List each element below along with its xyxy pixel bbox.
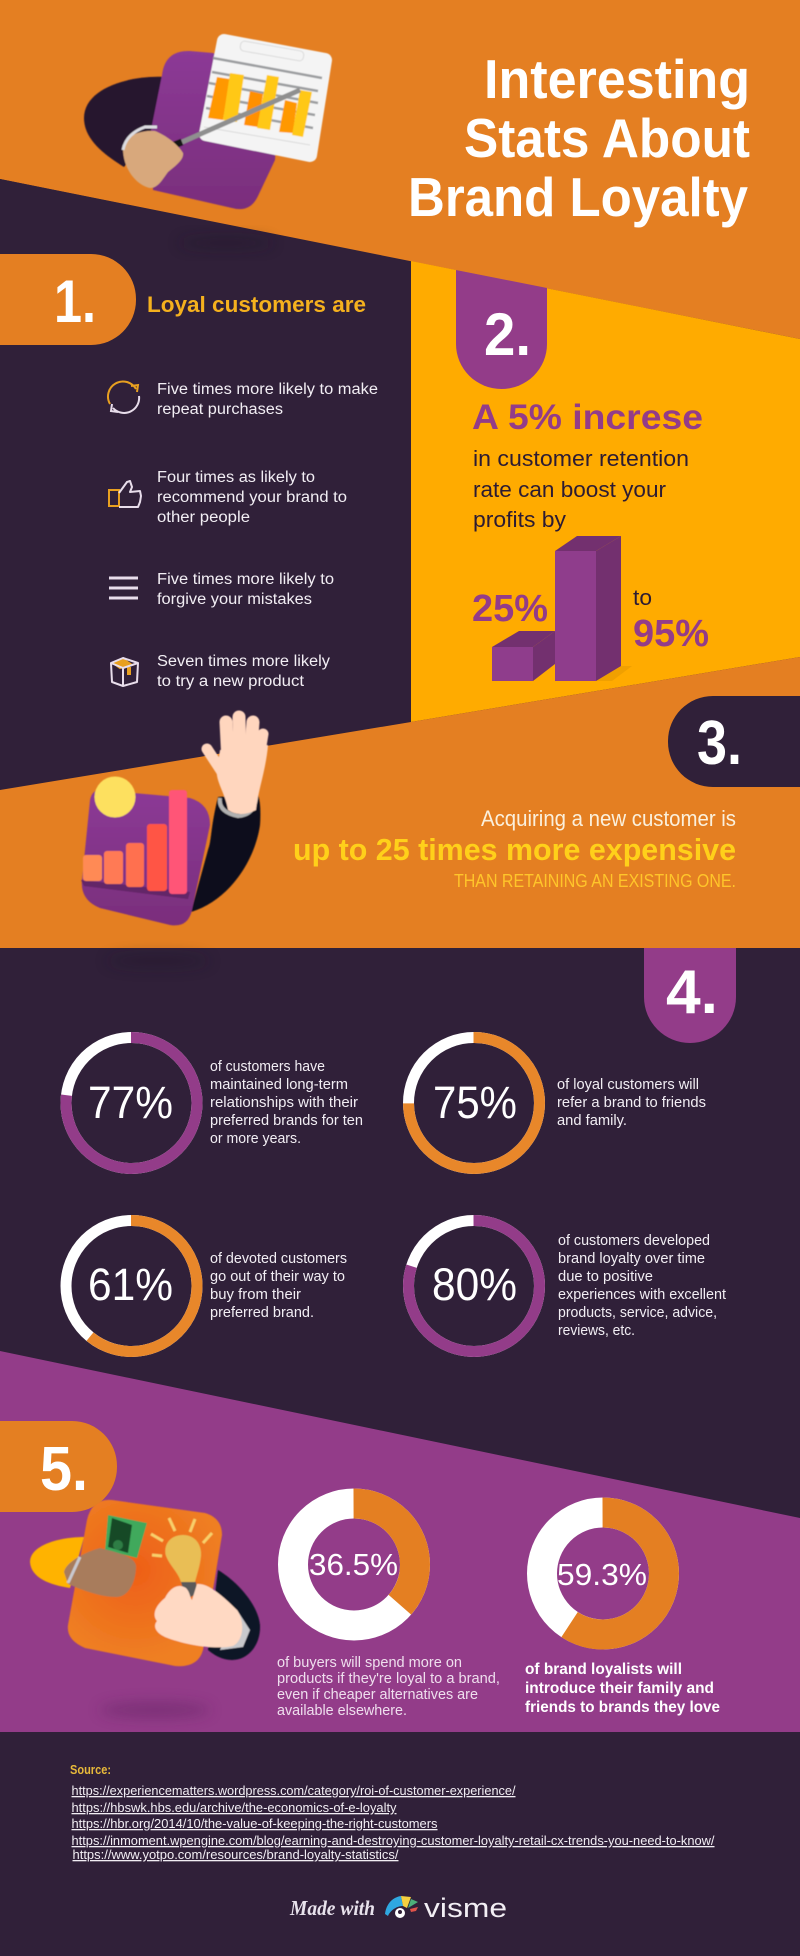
panel: section 5: [0, 1351, 800, 1732]
stat: 80%: due to positive: [558, 1269, 653, 1285]
stat: 80%: reviews, etc.: [558, 1323, 635, 1339]
text: Five times more likely to make: [157, 381, 378, 398]
source links: [72, 1783, 715, 1862]
heading: loyal customers are: Loyal customers are: [147, 292, 366, 317]
stat: 61%: [66, 1220, 347, 1352]
stat: 59.3%: of brand loyalists will: [525, 1661, 682, 1678]
item: forgive: [109, 571, 334, 608]
stat: 77%: 77%: [88, 1077, 173, 1128]
stat: 75%: [408, 1038, 706, 1168]
text: Seven times more likely: [157, 653, 330, 670]
title: [408, 48, 750, 228]
stat: 80%: products, service, advice,: [558, 1305, 717, 1321]
stat: 77%: of customers have: [210, 1059, 325, 1075]
made with visme logo: visme: [424, 1893, 507, 1923]
text: to try a new product: [157, 673, 305, 690]
stat: 75%: of loyal customers will: [557, 1077, 699, 1093]
stat: 77%: relationships with their: [210, 1095, 358, 1111]
stat: 25%: 25%: [472, 588, 548, 630]
number badge 4: 4.: [666, 958, 718, 1027]
number badge 5: 5.: [40, 1435, 88, 1504]
stat: 61%: go out of their way to: [210, 1269, 345, 1285]
illustration: hand pointing at chart: [84, 41, 325, 209]
text: retention: rate can boost your: [473, 477, 666, 502]
text: [157, 381, 378, 418]
text: retention: profits by: [473, 507, 566, 532]
stat: 61%: of devoted customers: [210, 1251, 347, 1267]
stat: 61%: preferred brand.: [210, 1305, 314, 1321]
text: acquiring: [293, 806, 736, 891]
chart: 3d bars: [480, 536, 632, 681]
number badge 2: [456, 270, 547, 389]
number badge 3: [668, 696, 800, 787]
icon: thumbs up: [109, 481, 141, 507]
item: repeat purchases: [108, 381, 378, 418]
text: acquiring: Acquiring a new customer is: [481, 806, 736, 831]
number badge 1: 1.: [54, 268, 96, 335]
text: [157, 653, 330, 690]
text: retention: in customer retention: [473, 446, 689, 471]
text: recommend your brand to: [157, 489, 347, 506]
item: new product: [111, 653, 330, 690]
stat: 75%: refer a brand to friends: [557, 1095, 706, 1111]
source links: https://hbr.org/2014/10/the-value-of-keeping-the-right-customers: [72, 1816, 438, 1831]
shadow under illustration: [99, 1702, 211, 1718]
made with visme logo: Made with: [289, 1896, 375, 1920]
panel: section 1 loyal customers: [0, 179, 411, 790]
stat: 59.3%: friends to brands they love: [525, 1699, 720, 1716]
source links: https://inmoment.wpengine.com/blog/earning-and-destroying-customer-loyalty-retail-cx-trends-you-need-to-know/: [72, 1833, 715, 1848]
stat: 59.3%: [525, 1512, 720, 1716]
stat: 59.3%: 59.3%: [557, 1557, 647, 1592]
made with visme logo: [289, 1893, 507, 1923]
illustration: hand with bar chart: [81, 717, 268, 925]
stat: 36.5%: products if they're loyal to a brand,: [277, 1671, 500, 1687]
title: Stats About: [464, 107, 750, 169]
source links: https://hbswk.hbs.edu/archive/the-economics-of-e-loyalty: [72, 1800, 397, 1815]
text: [157, 571, 334, 608]
stat: 59.3%: introduce their family and: [525, 1680, 714, 1697]
number badge 3: 3.: [697, 709, 742, 778]
panel: section 4 donuts: [66, 948, 736, 1352]
heading: source: Source:: [70, 1762, 111, 1777]
text: Five times more likely to: [157, 571, 334, 588]
stat: 80%: [408, 1220, 726, 1352]
text: [157, 469, 347, 526]
stat: 75%: 75%: [433, 1077, 517, 1128]
text: forgive your mistakes: [157, 591, 312, 608]
stat: 77%: maintained long-term: [210, 1077, 348, 1093]
number badge 2: 2.: [484, 301, 531, 368]
stat: 36.5%: [277, 1504, 500, 1719]
stat: 77%: [66, 1038, 363, 1168]
text: acquiring: THAN RETAINING AN EXISTING ONE.: [454, 871, 736, 891]
number badge 1: [0, 254, 136, 345]
stat: 80%: experiences with excellent: [558, 1287, 726, 1303]
stat: 36.5%: of buyers will spend more on: [277, 1655, 462, 1671]
source links: https://www.yotpo.com/resources/brand-loyalty-statistics/: [72, 1847, 399, 1862]
panel: header: [0, 0, 800, 339]
number badge 5: [0, 1421, 117, 1512]
text: Four times as likely to: [157, 469, 315, 486]
shadow under hand illustration: [106, 954, 210, 968]
text: acquiring: up to 25 times more expensive: [293, 832, 736, 867]
item: recommend: [109, 469, 347, 526]
label: to: to: [633, 585, 652, 610]
panel: section 3 acquisition: [0, 657, 800, 968]
panel: section 2 retention: [411, 261, 800, 722]
stat: 95%: 95%: [633, 613, 709, 655]
shadow under chart illustration: [178, 237, 274, 249]
stat: 36.5%: 36.5%: [309, 1547, 398, 1582]
icon: box: [111, 658, 138, 686]
stat: 80%: brand loyalty over time: [558, 1251, 705, 1267]
title: Interesting: [484, 48, 750, 110]
source links: https://experiencematters.wordpress.com/category/roi-of-customer-experience/: [72, 1783, 516, 1798]
stat: 36.5%: available elsewhere.: [277, 1703, 407, 1719]
stat: 80%: 80%: [432, 1259, 517, 1310]
stat: 77%: or more years.: [210, 1131, 301, 1147]
illustration: cash and light bulb: [30, 1500, 260, 1666]
panel: sources footer: [70, 1762, 715, 1923]
stat: 36.5%: even if cheaper alternatives are: [277, 1687, 478, 1703]
heading: a 5% increse: A 5% increse: [472, 398, 703, 437]
stat: 75%: and family.: [557, 1113, 627, 1129]
icon: menu lines: [109, 578, 138, 598]
number badge 4: [644, 948, 736, 1043]
text: retention: [473, 446, 689, 532]
title: Brand Loyalty: [408, 166, 748, 228]
icon: refresh: [108, 381, 139, 413]
stat: 61%: buy from their: [210, 1287, 301, 1303]
stat: 77%: preferred brands for ten: [210, 1113, 363, 1129]
text: other people: [157, 509, 250, 526]
stat: 61%: 61%: [88, 1259, 173, 1310]
stat: 80%: of customers developed: [558, 1233, 710, 1249]
text: repeat purchases: [157, 401, 283, 418]
